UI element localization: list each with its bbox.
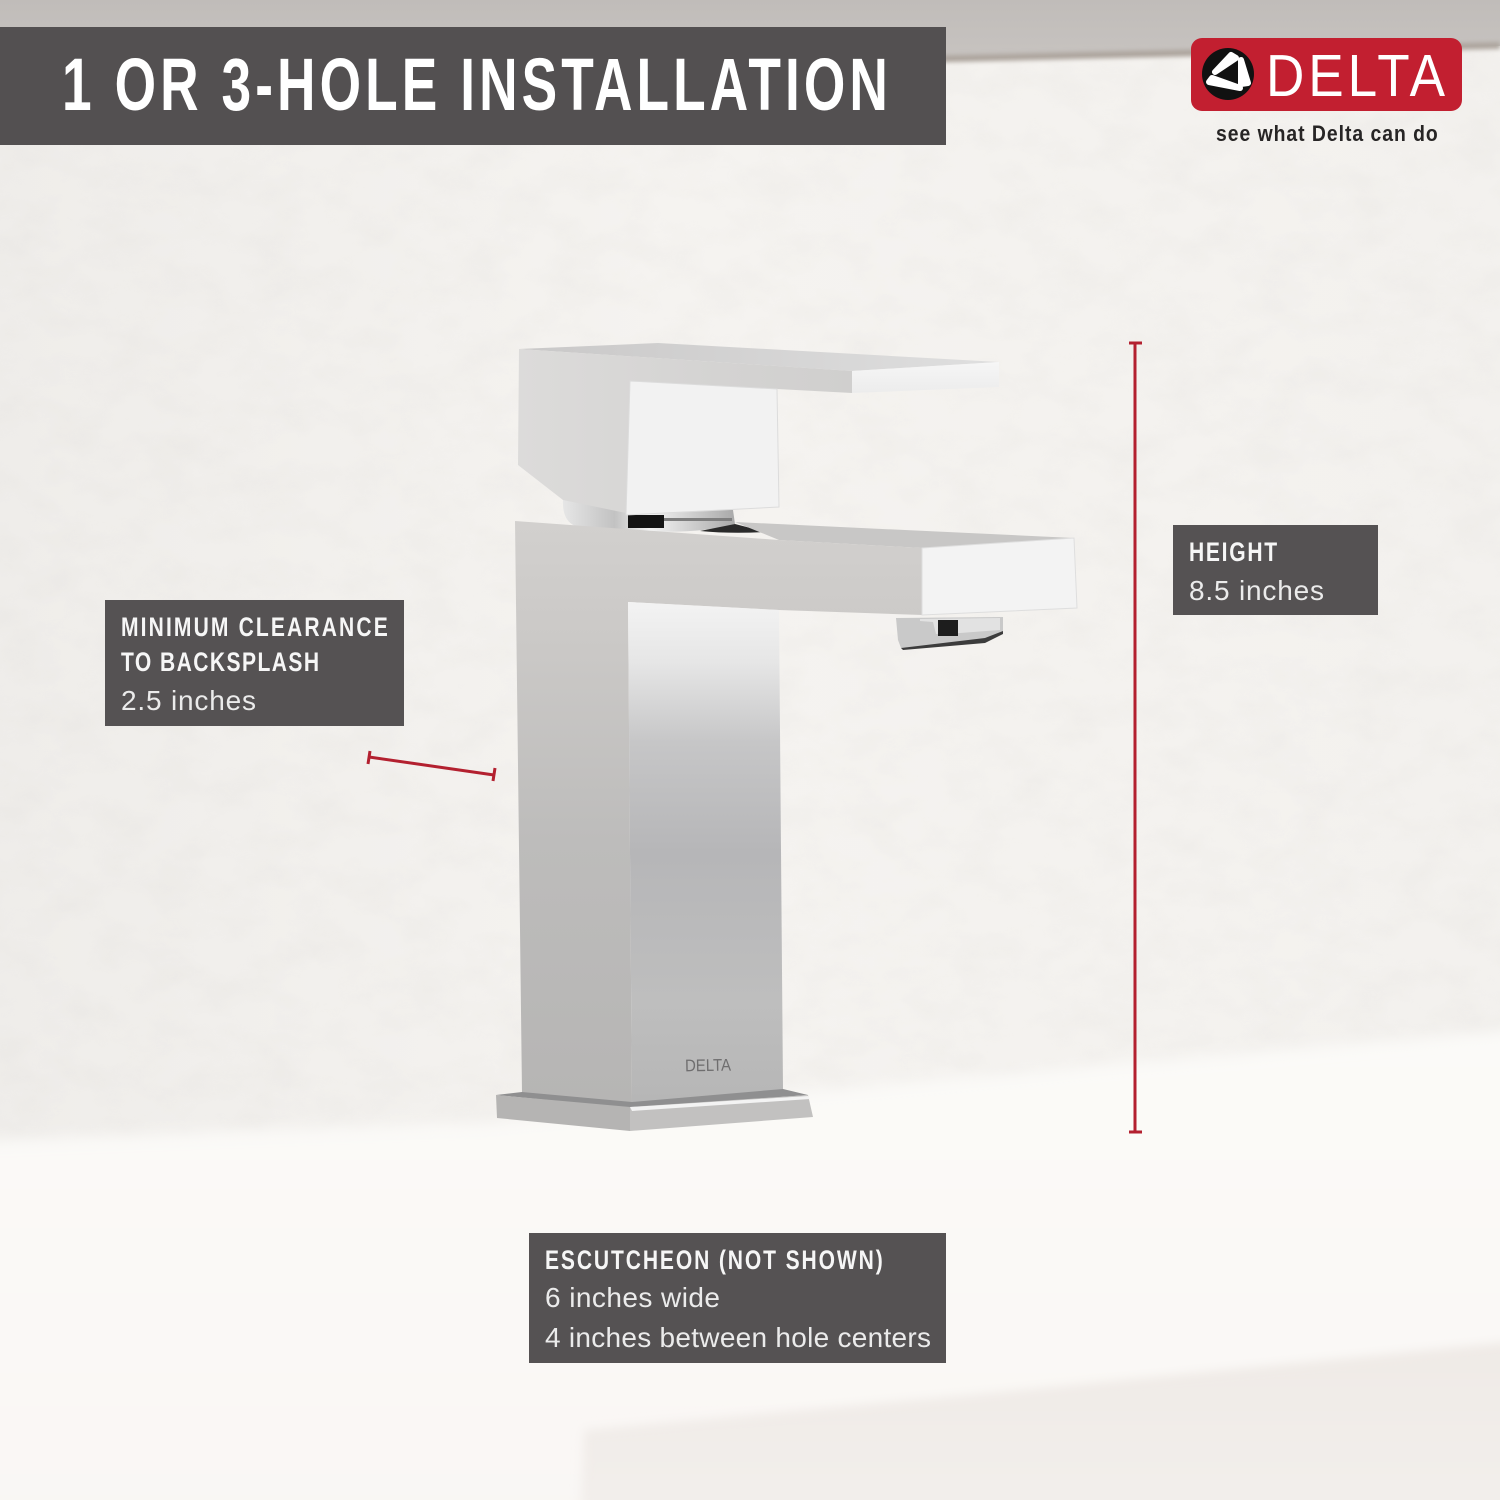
dimension line: height — [1129, 343, 1142, 1132]
background: plaster wall — [0, 0, 1500, 1150]
callout: height — [1173, 525, 1378, 615]
callout: escutcheon — [529, 1233, 946, 1363]
callout: escutcheon: 4 inches between hole centers — [545, 1322, 931, 1353]
logo: tagline: see what Delta can do — [1216, 122, 1438, 146]
callout: escutcheon: ESCUTCHEON (NOT SHOWN) — [545, 1246, 883, 1276]
callout: escutcheon: 6 inches wide — [545, 1282, 720, 1313]
faucet: base plate — [496, 1089, 813, 1131]
title bar — [0, 27, 946, 145]
background: ceiling band — [0, 0, 1500, 85]
callout: minimum clearance — [105, 600, 404, 726]
title bar: 1 OR 3-HOLE INSTALLATION — [62, 43, 888, 126]
Delta logo — [1191, 38, 1462, 146]
faucet: handle lever — [518, 343, 999, 515]
faucet: column and spout body — [515, 521, 1077, 1103]
dimension line: backsplash clearance — [368, 751, 495, 781]
faucet: cartridge stem — [563, 500, 766, 533]
logo: red badge — [1191, 38, 1462, 111]
callout: minimum clearance: TO BACKSPLASH — [121, 648, 319, 678]
faucet: aerator — [896, 617, 1003, 650]
background: white countertop and sink — [0, 1030, 1500, 1500]
callout: height: HEIGHT — [1189, 538, 1277, 568]
callout: height: 8.5 inches — [1189, 575, 1324, 606]
logo: black circle mark — [1202, 48, 1254, 100]
logo: DELTA wordmark: DELTA — [1266, 42, 1446, 109]
callout: minimum clearance: MINIMUM CLEARANCE — [121, 613, 388, 643]
faucet — [496, 343, 1077, 1131]
callout: minimum clearance: 2.5 inches — [121, 685, 256, 716]
faucet: engraved DELTA mark: DELTA — [685, 1056, 732, 1075]
